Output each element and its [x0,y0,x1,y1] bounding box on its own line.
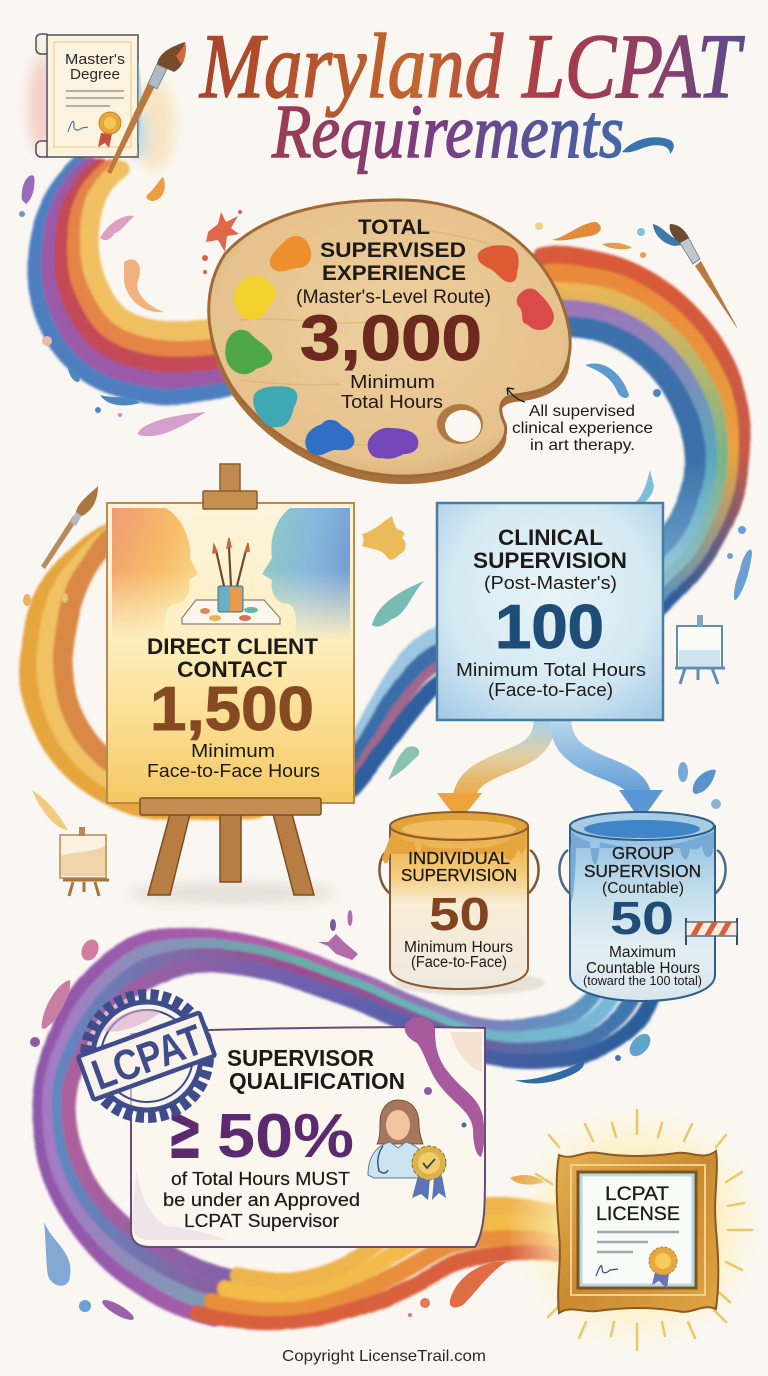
paint blobs [225,236,554,459]
easel legs and shadow [127,464,337,904]
ribbon: blue stream behind direct client canvas [350,632,445,790]
watercolor wash behind degree scroll [28,55,175,170]
panel: clinical supervision: (Face-to-Face) [488,679,613,700]
paint can: individual supervision: 50 [429,888,490,940]
canvas text [147,634,320,781]
panel: LCPAT license frame: LCPAT [605,1184,669,1205]
icon: master's degree scroll: Master's [65,51,125,68]
paint drip [405,1017,484,1157]
card text [163,1045,405,1231]
panel: direct client contact canvas [107,503,354,803]
palette: total supervised experience [209,200,570,484]
palette text: Total Hours [341,391,443,412]
paint can: group supervision: Maximum [609,944,676,961]
title [198,15,745,174]
ribbon: golden ring around easel [29,533,255,810]
paint can: individual supervision: INDIVIDUAL [408,848,510,868]
ribbon: warm stream to license frame [197,1206,565,1322]
canvas text: Face-to-Face Hours [147,760,320,781]
icon: master's degree scroll: Degree [70,66,120,83]
panel: clinical supervision: (Post-Master's) [484,572,617,593]
callout: note about art therapy: clinical experience [512,420,653,437]
stamp: LCPAT seal [65,977,228,1136]
mini easel: left side [60,827,109,896]
thumb hole [437,404,483,444]
stamp: LCPAT seal: LCPAT [86,1016,209,1100]
paint can: individual supervision [379,812,545,995]
paint splashes and droplets [19,175,752,1323]
panel: clinical supervision: Minimum Total Hours [456,659,646,680]
icon: paintbrush top left [107,42,186,174]
palette text: SUPERVISED [320,239,466,262]
palette text: Minimum [350,371,435,392]
card text: of Total Hours MUST [171,1168,350,1189]
arrows: supervision split [437,716,663,822]
paint can: group supervision: (toward the 100 total) [583,974,702,988]
panel: clinical supervision: CLINICAL [498,525,603,550]
icon: two facing heads [112,508,350,640]
panel: clinical supervision [437,503,663,720]
paint can: group supervision: GROUP [612,843,674,863]
paint can: individual supervision: SUPERVISION [401,865,517,885]
callout: note about art therapy: All supervised [529,403,635,420]
title: Requirements [271,90,624,174]
easel top clamp and shelf [140,491,321,815]
paint can: group supervision: (Countable) [602,880,684,897]
panel: supervisor qualification [131,1017,485,1247]
icon: master's degree scroll [36,34,142,157]
panel: LCPAT license frame [557,1151,718,1313]
card text: be under an Approved [163,1189,360,1210]
card text: ≥ [167,1083,203,1178]
palette text: (Master's-Level Route) [296,287,491,308]
icon: approved supervisor [368,1100,446,1200]
ribbon: rainbow from palette to clinical box [542,257,740,614]
mini easel: right side [675,615,725,684]
glow behind license [507,1103,767,1353]
icon: barrier limit [686,918,737,945]
icon: radiating light rays [536,1110,752,1350]
ribbon: rainbow from degree to palette [37,166,225,395]
paint can: group supervision: Countable Hours [586,960,700,977]
canvas text: CONTACT [177,657,288,682]
palette text [296,216,491,412]
paint can: group supervision [559,812,726,1001]
icon: paintbrush top right [653,224,737,328]
paint can: individual supervision: Minimum Hours [404,939,513,956]
card text: QUALIFICATION [229,1068,405,1094]
paint can: group supervision: 50 [610,892,674,944]
callout: note about art therapy: in art therapy. [530,437,635,454]
callout: note about art therapy [507,388,653,454]
palette text: EXPERIENCE [322,262,466,285]
panel: clinical supervision: 100 [495,593,604,662]
canvas text: DIRECT CLIENT [147,634,319,659]
footer copyright: Copyright LicenseTrail.com [282,1348,486,1365]
palette text: 3,000 [300,302,482,374]
paint can: individual supervision: (Face-to-Face) [411,954,507,971]
canvas text: 1,500 [150,675,314,744]
palette text: TOTAL [358,216,430,239]
ribbon: purple and blue sweep around supervisor card [39,935,651,1319]
canvas text: Minimum [191,740,275,761]
card text: 50% [217,1102,354,1171]
panel: LCPAT license frame: LICENSE [596,1204,680,1225]
icon: paintbrush left of easel [41,486,98,569]
panel: clinical supervision: SUPERVISION [473,548,627,573]
card text: LCPAT Supervisor [184,1210,339,1231]
paint can: group supervision: SUPERVISION [584,861,701,881]
card text: SUPERVISOR [227,1045,374,1071]
